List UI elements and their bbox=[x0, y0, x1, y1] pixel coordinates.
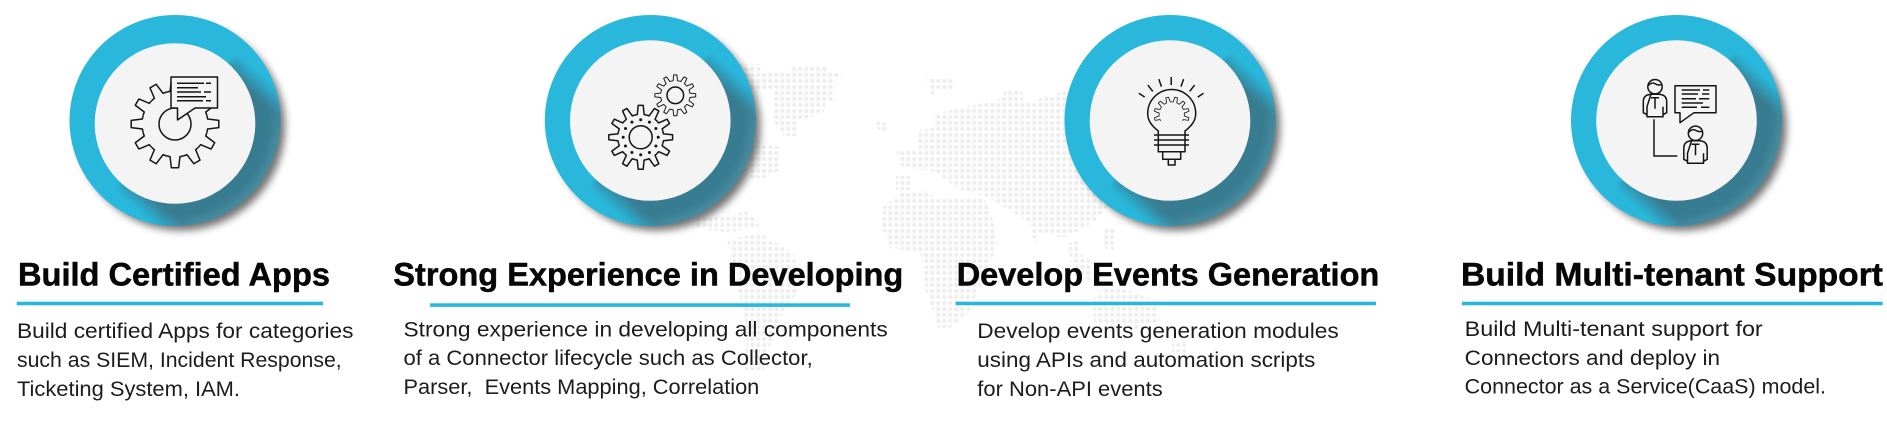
underline bbox=[17, 302, 323, 305]
body text: Build Multi-tenant support for bbox=[1465, 318, 1763, 341]
panel: strong experience bbox=[393, 15, 903, 399]
icon: light bulb bbox=[1139, 77, 1204, 165]
body text: Strong experience in developing all components bbox=[404, 318, 888, 342]
badge: blue ring with icon bbox=[70, 15, 285, 230]
body text: Connectors and deploy in bbox=[1465, 347, 1720, 370]
panel: build certified apps bbox=[17, 15, 353, 401]
body text bbox=[404, 318, 888, 399]
underline bbox=[1462, 302, 1883, 305]
underline bbox=[956, 302, 1376, 305]
heading: Build Multi-tenant Support bbox=[1461, 256, 1883, 292]
panel: build multi-tenant support bbox=[1461, 15, 1883, 399]
body text: Connector as a Service(CaaS) model. bbox=[1465, 376, 1826, 399]
body text: for Non-API events bbox=[977, 378, 1163, 401]
underline bbox=[430, 303, 850, 307]
background: dotted world map bbox=[695, 64, 1186, 370]
icon: two gears bbox=[609, 75, 696, 169]
badge: blue ring with icon bbox=[1571, 15, 1786, 230]
body text bbox=[977, 320, 1339, 401]
body text: Develop events generation modules bbox=[977, 320, 1339, 343]
heading: Develop Events Generation bbox=[957, 256, 1379, 292]
badge: blue ring with icon bbox=[1064, 15, 1280, 230]
body text: Build certified Apps for categories bbox=[17, 320, 354, 343]
icon: two people and speech bubble bbox=[1643, 80, 1716, 163]
body text: such as SIEM, Incident Response, bbox=[17, 349, 342, 372]
body text: using APIs and automation scripts bbox=[977, 349, 1315, 372]
body text: Parser, Events Mapping, Correlation bbox=[404, 376, 759, 399]
body text: of a Connector lifecycle such as Collector, bbox=[404, 347, 813, 370]
body text bbox=[1465, 318, 1826, 399]
body text bbox=[17, 320, 354, 401]
icon: gear with speech bubble bbox=[131, 77, 219, 168]
badge: blue ring with icon bbox=[545, 15, 760, 230]
body text: Ticketing System, IAM. bbox=[17, 378, 240, 401]
heading: Build Certified Apps bbox=[18, 256, 330, 292]
heading: Strong Experience in Developing bbox=[393, 256, 903, 292]
panel: develop events generation bbox=[956, 15, 1379, 401]
